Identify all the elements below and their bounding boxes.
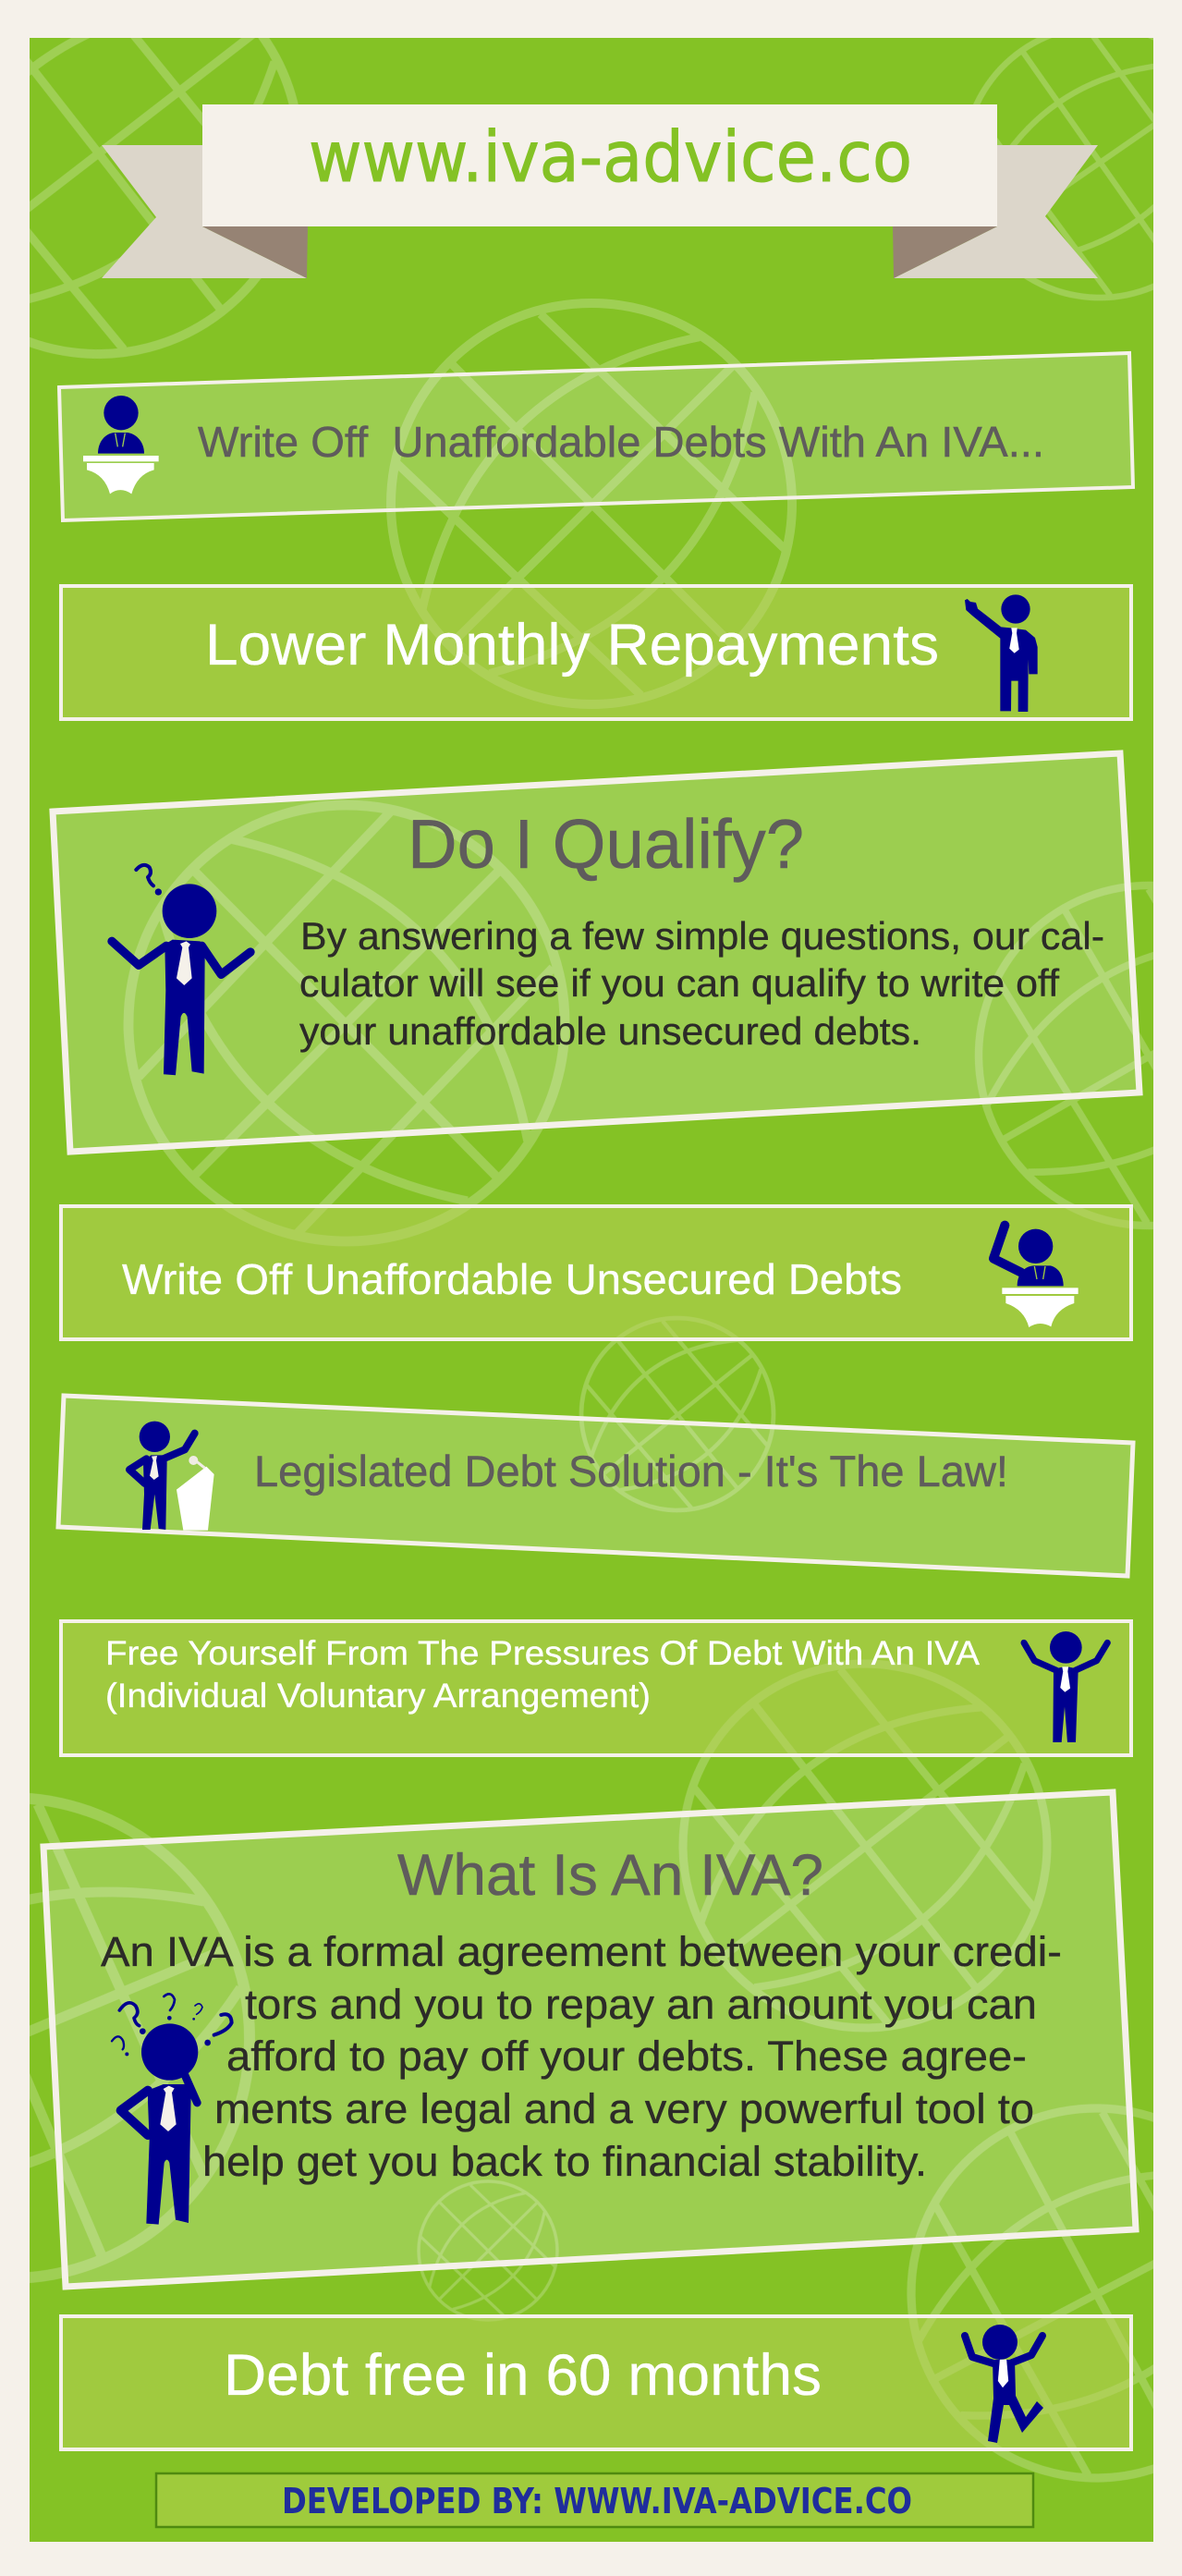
panel heading: What Is An IVA? bbox=[397, 1843, 823, 1908]
panel: lower monthly repayments bbox=[61, 586, 1131, 719]
icon: man pointing bbox=[965, 594, 1038, 712]
panel body text: By answering a few simple questions, our cal- bbox=[300, 914, 1104, 958]
ribbon banner bbox=[102, 104, 1098, 278]
panel box bbox=[58, 1396, 1133, 1576]
panel text line 1: Free Yourself From The Pressures Of Debt With An IVA bbox=[105, 1634, 980, 1672]
panel box bbox=[61, 586, 1131, 719]
icon: man with arms raised bbox=[1024, 1631, 1107, 1742]
icon: man at lectern bbox=[83, 396, 159, 494]
panel: do I qualify bbox=[53, 753, 1139, 1152]
footer text: DEVELOPED BY: WWW.IVA-ADVICE.CO bbox=[282, 2481, 912, 2521]
panel body text: afford to pay off your debts. These agree- bbox=[226, 2033, 1027, 2080]
panel text: Write Off Unaffordable Unsecured Debts bbox=[122, 1255, 902, 1303]
panel box bbox=[61, 2316, 1131, 2449]
icon: jumping man bbox=[965, 2325, 1043, 2443]
footer box bbox=[156, 2473, 1033, 2527]
ribbon face bbox=[202, 104, 997, 226]
icon: man beside podium bbox=[129, 1422, 214, 1531]
panel body text: An IVA is a formal agreement between your credi- bbox=[101, 1928, 1062, 1975]
panel: legislated debt solution bbox=[58, 1396, 1133, 1576]
panel body text: ments are legal and a very powerful tool to bbox=[214, 2085, 1034, 2132]
panel box bbox=[43, 1792, 1136, 2287]
panel box bbox=[61, 1621, 1131, 1755]
ribbon left fold bbox=[202, 226, 308, 278]
panel body text: tors and you to repay an amount you can bbox=[245, 1981, 1037, 2028]
icon: man raising arm at lectern bbox=[993, 1226, 1078, 1327]
panel text: Debt free in 60 months bbox=[224, 2343, 822, 2408]
panel body text bbox=[299, 914, 1104, 1053]
panel box bbox=[53, 753, 1139, 1152]
site title: www.iva-advice.co bbox=[309, 116, 912, 198]
ribbon right fold bbox=[893, 226, 997, 278]
panel body text: culator will see if you can qualify to write off bbox=[299, 961, 1059, 1005]
footer credit bbox=[156, 2473, 1033, 2527]
panel: write off headline bbox=[59, 353, 1133, 520]
panel: debt free in 60 months bbox=[61, 2316, 1131, 2449]
headline text: Write Off Unaffordable Debts With An IVA... bbox=[198, 418, 1044, 466]
panel: what is an IVA bbox=[43, 1792, 1136, 2287]
panel text: Legislated Debt Solution - It's The Law! bbox=[254, 1447, 1008, 1496]
ribbon left tail bbox=[102, 145, 307, 278]
panel box bbox=[59, 353, 1133, 520]
panel body text: your unaffordable unsecured debts. bbox=[299, 1009, 921, 1053]
panel heading: Do I Qualify? bbox=[408, 805, 804, 883]
icon: thinking man with question marks bbox=[112, 1994, 232, 2225]
panel body text: help get you back to financial stability. bbox=[202, 2138, 927, 2185]
panel text line 2: (Individual Voluntary Arrangement) bbox=[105, 1677, 651, 1715]
panel box bbox=[61, 1206, 1131, 1339]
panel: write off unsecured debts bbox=[61, 1206, 1131, 1339]
ribbon right tail bbox=[894, 145, 1098, 278]
panel body text bbox=[101, 1928, 1062, 2185]
icon: shrugging man with question mark bbox=[112, 865, 250, 1075]
panel text: Lower Monthly Repayments bbox=[205, 613, 939, 678]
panel: free yourself bbox=[61, 1621, 1131, 1755]
